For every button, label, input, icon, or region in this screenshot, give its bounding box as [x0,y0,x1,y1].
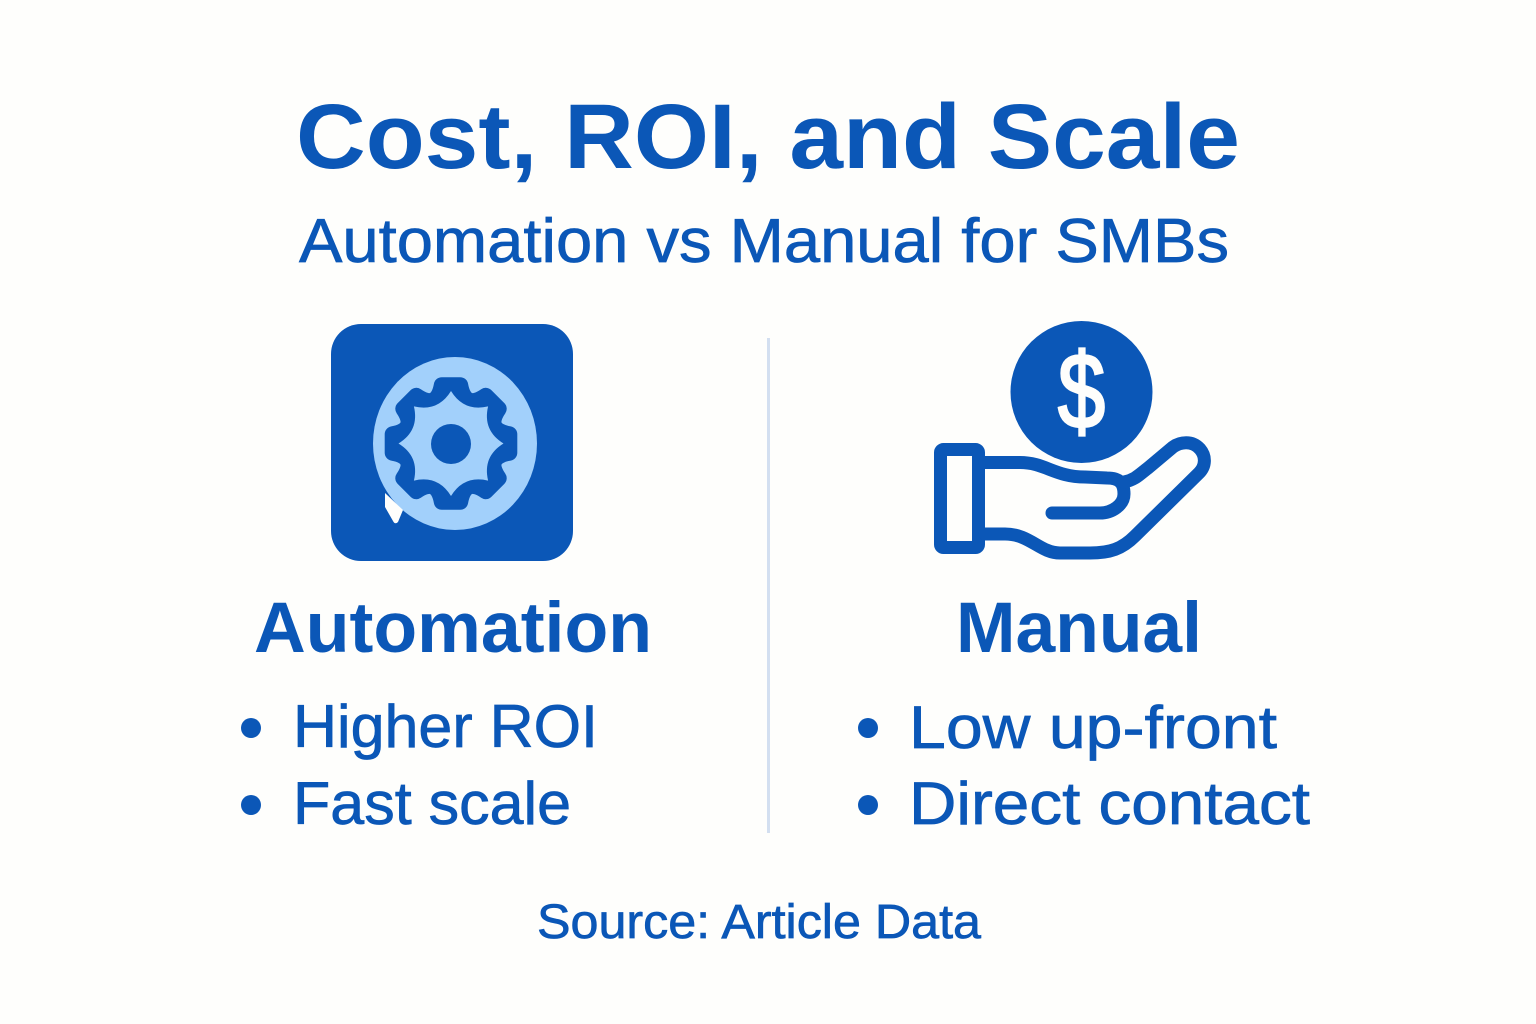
title: Cost, ROI, and Scale [296,86,1240,188]
source note: Source: Article Data [537,896,981,949]
automation bullet list [241,693,598,837]
divider [767,338,770,833]
manual bullet list [858,694,1310,837]
icon: hand holding dollar coin: $ [1058,333,1105,451]
icon: hand holding dollar coin [940,321,1204,553]
automation bullet list: Higher ROI [293,693,598,760]
manual bullet list: Low up-front [909,694,1277,761]
automation bullet list: Fast scale [293,770,571,837]
manual bullet list: Direct contact [909,770,1310,837]
subtitle: Automation vs Manual for SMBs [299,207,1229,276]
heading: manual: Manual [956,589,1202,668]
icon: automation gear [331,324,573,561]
heading: automation: Automation [254,589,652,668]
